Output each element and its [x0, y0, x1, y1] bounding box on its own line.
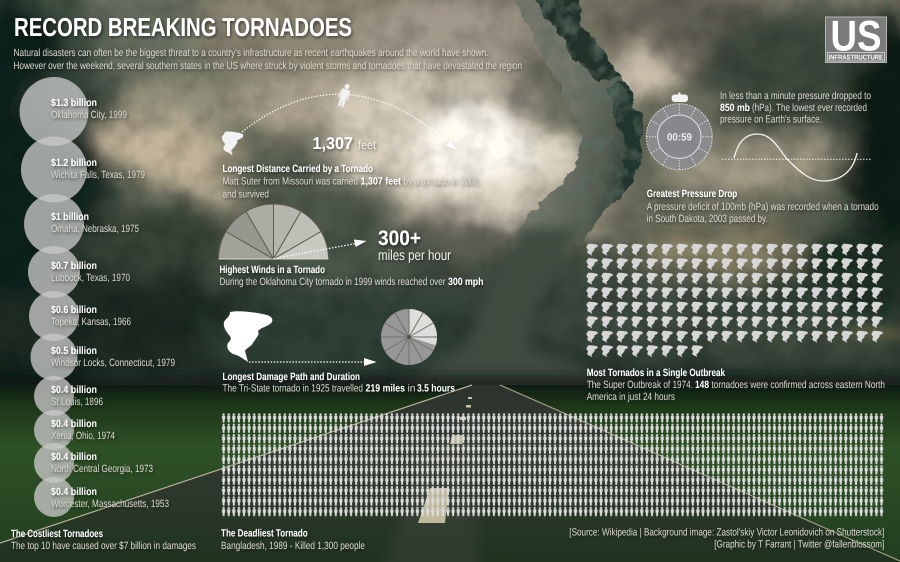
bubble: Lubbock [28, 246, 130, 298]
arrow: wind direction [274, 240, 366, 258]
icon: stopwatch [646, 92, 712, 170]
caption: damage path: 3.5 hours [417, 383, 455, 395]
bubble: Topeka: $0.6 billion [51, 304, 97, 316]
caption: damage path: 219 miles [366, 383, 405, 395]
caption: outbreak: 148 [695, 379, 709, 391]
caption: longest distance: 1,307 feet [360, 176, 401, 188]
bubble: Oklahoma City [20, 77, 127, 146]
caption: damage path: Longest Damage Path and Duration [222, 371, 360, 383]
bubble: Oklahoma City: $1.3 billion [51, 97, 97, 109]
panel: most tornadoes in a single outbreak [586, 244, 886, 403]
text: pressure description: (hPa). The lowest ever recorded [752, 102, 867, 114]
caption: pressure drop: Greatest Pressure Drop [647, 188, 737, 200]
caption: damage path: The Tri-State tornado in 1925 travelled [222, 383, 363, 395]
caption: longest distance: and survived [222, 188, 269, 200]
panel: deadliest tornado [221, 413, 884, 552]
caption: longest distance: Longest Distance Carried by a Tornado [222, 163, 373, 175]
caption: outbreak: America in just 24 hours [587, 391, 675, 403]
bubble: Windsor Locks: Windsor Locks, Connecticut, 1979 [51, 357, 175, 369]
icon: small tornado [222, 132, 243, 155]
bubble: St Louis: St Louis, 1896 [51, 396, 103, 408]
caption: outbreak [587, 367, 885, 403]
panel: greatest pressure drop [646, 90, 879, 225]
caption: highest winds: 300 mph [448, 276, 484, 288]
bubble: Xenia: Xenia, Ohio, 1974 [51, 430, 115, 442]
intro text [14, 47, 522, 72]
bubble: Lubbock: $0.7 billion [51, 260, 97, 272]
chart: pressure wave [722, 134, 872, 181]
figure: 300+ miles per hour [378, 227, 451, 264]
bubble: Wichita Falls: $1.2 billion [51, 157, 97, 169]
caption: longest distance: by a tornado in 2006, [404, 176, 481, 188]
bubble: Omaha: $1 billion [51, 211, 89, 223]
chart: duration pie [381, 309, 437, 365]
caption: pressure drop [647, 188, 879, 225]
caption: damage path [222, 371, 455, 395]
caption: deadliest tornado: Bangladesh, 1989 - Killed 1,300 people [221, 540, 365, 552]
caption: costliest tornadoes: The top 10 have caused over $7 billion in damages [11, 540, 196, 552]
background: tornado funnel [402, 0, 644, 385]
intro text: However over the weekend, several southern states in the US where struck by violent storms and tornadoes that have devastated the region [14, 60, 522, 72]
text: pressure description: 850 mb [720, 102, 750, 114]
panel: longest damage path [222, 309, 455, 395]
figure: 1,307 feet: feet [358, 138, 377, 152]
chart: 1300 people icons [221, 413, 884, 517]
bubble: Topeka [29, 291, 131, 341]
bubble: Topeka: Topeka, Kansas, 1966 [51, 316, 131, 328]
bubble: Windsor Locks [30, 334, 175, 380]
bubble: Oklahoma City: Oklahoma City, 1999 [51, 109, 127, 121]
figure: 1,307 feet: 1,307 [312, 134, 353, 153]
caption: deadliest tornado [221, 528, 365, 552]
background: road and fields [0, 385, 900, 562]
panel: highest winds [218, 204, 484, 288]
bubble: Windsor Locks: $0.5 billion [51, 345, 97, 357]
text: pressure description: pressure on Earth's surface. [720, 114, 822, 126]
bubble: Worcester: Worcester, Massachusetts, 1953 [51, 498, 169, 510]
caption: outbreak: The Super Outbreak of 1974. [587, 379, 693, 391]
arrow: damage path [249, 358, 376, 366]
figure: 1,307 feet [312, 134, 377, 153]
background: horizon haze [0, 376, 900, 388]
caption: highest winds [220, 264, 484, 288]
bubble: Omaha: Omaha, Nebraska, 1975 [51, 223, 139, 235]
bubble: Lubbock: Lubbock, Texas, 1970 [51, 272, 130, 284]
icon: large tornado [224, 311, 272, 362]
caption: highest winds: During the Oklahoma City tornado in 1999 winds reached over [220, 276, 446, 288]
logo: US Infrastructure: US [830, 12, 882, 60]
caption: costliest tornadoes [11, 528, 196, 552]
bubble: Wichita Falls [21, 136, 145, 202]
figure: 300+ miles per hour: 300+ [378, 227, 421, 250]
bubble: Wichita Falls: Wichita Falls, Texas, 1979 [51, 169, 145, 181]
caption: longest distance [222, 163, 481, 200]
bubble: North Central Georgia: North Central Georgia, 1973 [51, 463, 153, 475]
bubble: Xenia [34, 410, 115, 450]
bubble: St Louis [34, 376, 103, 416]
icon: flying person [335, 82, 353, 108]
figure: 300+ miles per hour: miles per hour [378, 248, 451, 264]
chart: 148 tornado icons [586, 244, 886, 360]
title: RECORD BREAKING TORNADOES [14, 12, 352, 42]
arc arrow [242, 94, 456, 150]
bubble: St Louis: $0.4 billion [51, 384, 97, 396]
text: pressure description [720, 90, 871, 126]
bubble: North Central Georgia: $0.4 billion [51, 451, 97, 463]
source credits [569, 527, 884, 551]
caption: deadliest tornado: The Deadliest Tornado [221, 528, 308, 540]
icon: stopwatch: 00:59 [667, 132, 692, 144]
chart: wind speed semicircle [218, 204, 328, 259]
caption: damage path: in [408, 383, 416, 395]
caption: costliest tornadoes: The Costliest Tornadoes [11, 528, 103, 540]
caption: pressure drop: in South Dakota, 2003 passed by. [647, 213, 768, 225]
bubble: Xenia: $0.4 billion [51, 418, 97, 430]
caption: outbreak: Most Tornados in a Single Outbreak [587, 367, 725, 379]
bubble: Worcester: $0.4 billion [51, 486, 97, 498]
panel: costliest tornadoes [11, 77, 196, 552]
caption: longest distance: Matt Suter from Missouri was carried [222, 176, 358, 188]
bubble: North Central Georgia [34, 443, 153, 483]
bubble: Worcester [34, 477, 169, 517]
intro text: Natural disasters can often be the biggest threat to a country's infrastructure as recent earthquakes around the world have shown. [14, 47, 488, 59]
caption: highest winds: Highest Winds in a Tornado [220, 264, 325, 276]
panel: longest distance carried [222, 82, 481, 200]
logo: US Infrastructure: INFRASTRUCTURE [828, 55, 883, 62]
bubble: Omaha [24, 194, 139, 254]
